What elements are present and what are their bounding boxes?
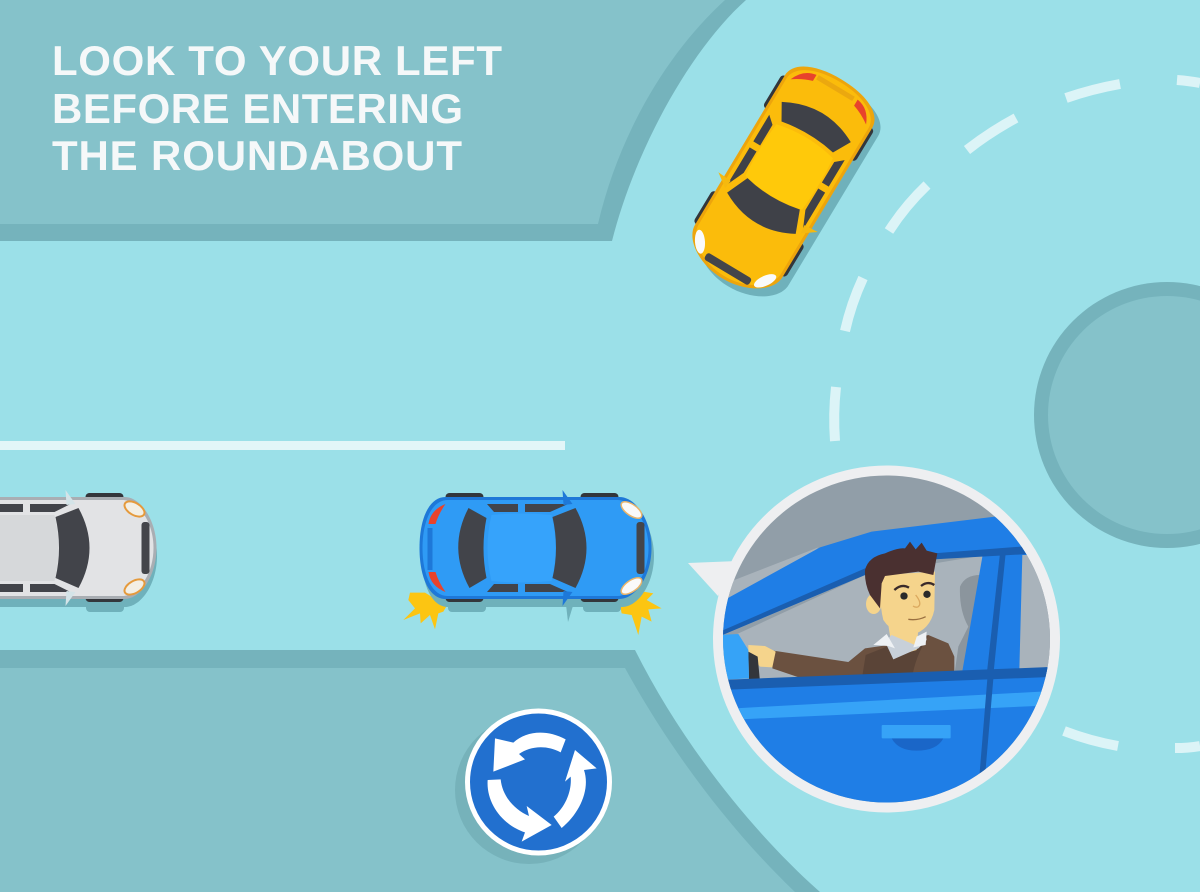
car roof and pillar (718, 517, 1028, 675)
sign disc (468, 711, 610, 853)
title: BEFORE ENTERING (52, 85, 463, 132)
limousine body (0, 490, 156, 606)
brake sparks (403, 592, 662, 635)
sign shadow (455, 716, 603, 864)
title: THE ROUNDABOUT (52, 132, 462, 179)
title: LOOK TO YOUR LEFT (52, 37, 502, 84)
yellow car body (673, 50, 891, 308)
blue car (403, 490, 662, 635)
callout bubble: driver looking left (688, 460, 1060, 827)
car door (730, 667, 1048, 802)
seat headrest (955, 575, 979, 671)
roundabout dashed line (834, 80, 1200, 748)
callout pointer (688, 561, 738, 596)
sign arrows (488, 733, 597, 842)
central island (1034, 282, 1200, 548)
white limousine (0, 490, 157, 612)
steering wheel and dash (748, 652, 760, 682)
top sidewalk (0, 0, 746, 241)
blue car body (420, 490, 652, 606)
bottom sidewalk (0, 650, 820, 892)
title (52, 37, 502, 179)
yellow car shadow (685, 61, 891, 313)
driver scene (723, 476, 1050, 802)
blue car shadow (422, 500, 654, 622)
lane marking (0, 441, 565, 450)
yellow car (673, 50, 891, 313)
callout ring (713, 466, 1060, 812)
driver (748, 542, 954, 680)
limousine shadow (0, 500, 157, 612)
roundabout road sign (455, 711, 610, 864)
